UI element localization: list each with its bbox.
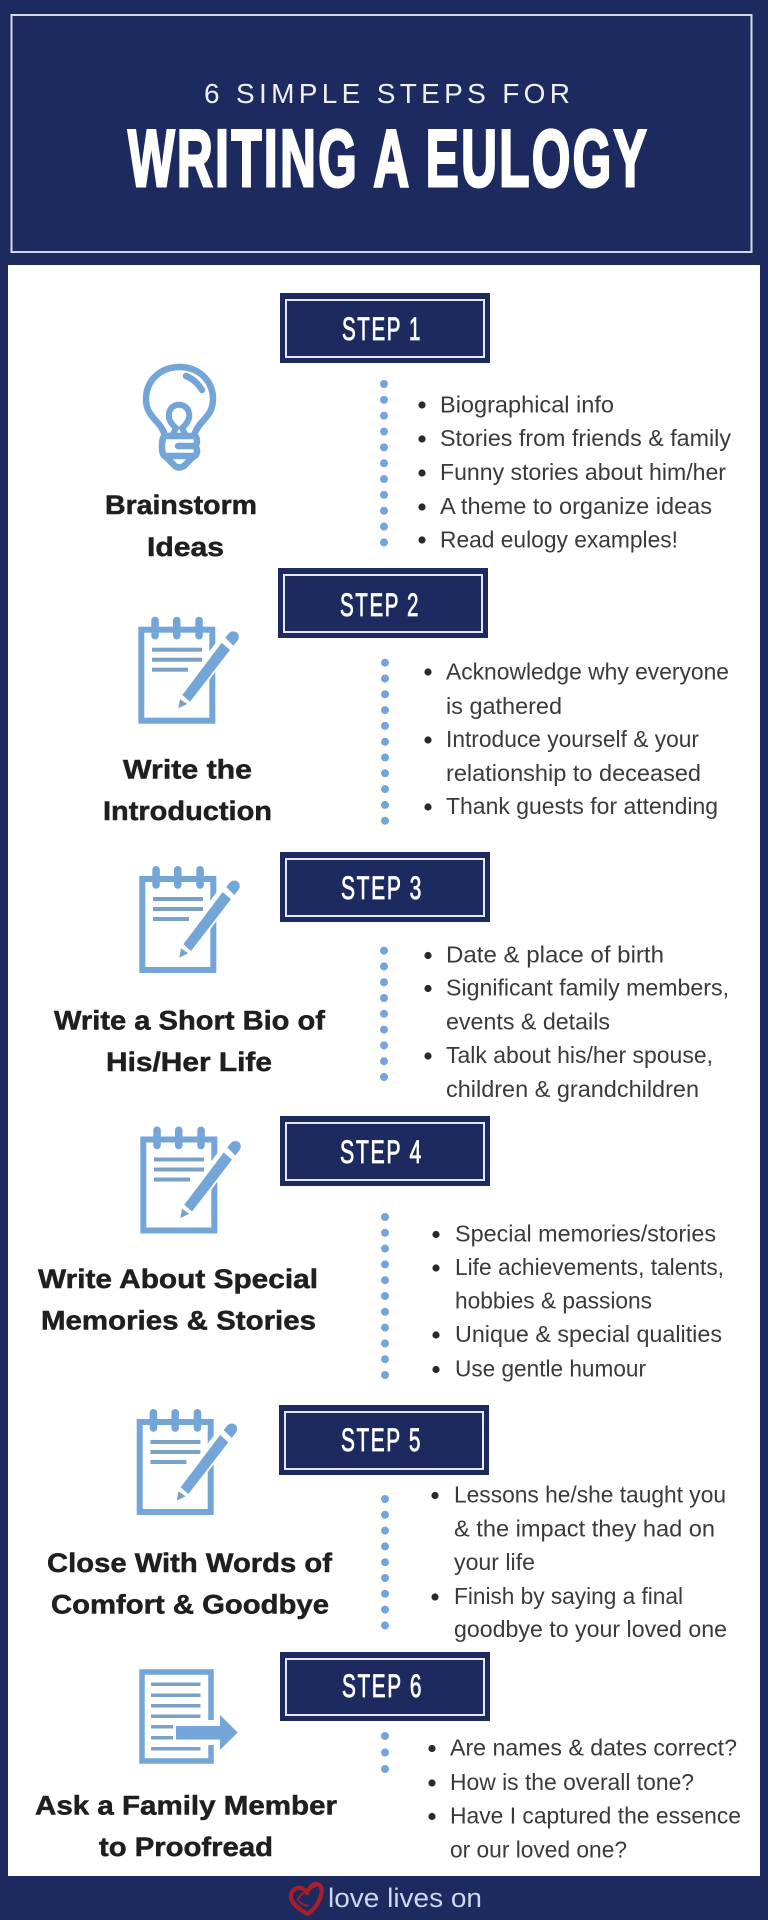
step 6 badge: STEP 6: [342, 1668, 423, 1704]
dotted divider: [381, 663, 389, 821]
heading: write a short bio: Write a Short Bio of: [54, 1006, 326, 1036]
bullet list: How is the overall tone?: [450, 1769, 694, 1795]
step 3 badge: [280, 852, 490, 922]
heading: brainstorm ideas: Brainstorm: [105, 490, 257, 520]
bullet list: Use gentle humour: [455, 1356, 646, 1382]
heading: write about special memories: Write About Special: [38, 1264, 318, 1294]
bullet list: A theme to organize ideas: [440, 493, 712, 519]
bullet list: [432, 1220, 724, 1382]
bullet list: [424, 658, 729, 819]
bullet list: [431, 1482, 727, 1642]
bullet list: goodbye to your loved one: [454, 1616, 727, 1642]
bullet list: Finish by saying a final: [454, 1583, 683, 1609]
bullet list: Talk about his/her spouse,: [446, 1042, 713, 1068]
panel: step 6: [35, 1652, 741, 1862]
heading: write the introduction: [103, 754, 272, 826]
icon: light bulb: [146, 367, 213, 468]
panel: step 5: [47, 1405, 727, 1642]
icon: notepad and pencil: [140, 1409, 237, 1512]
icon: notepad and pencil: [141, 617, 239, 721]
step 1 badge: [280, 293, 490, 363]
header panel: [12, 15, 752, 252]
bullet list: Date & place of birth: [446, 942, 664, 968]
dotted divider: [381, 1217, 389, 1375]
heading: close with words of comfort: Comfort & Goodbye: [51, 1590, 329, 1620]
bullet list: hobbies & passions: [455, 1288, 652, 1314]
bullet list: & the impact they had on: [454, 1516, 715, 1542]
bullet list: [418, 392, 731, 552]
panel: step 2: [103, 568, 729, 826]
heading: write the introduction: Introduction: [103, 796, 272, 826]
step 5 badge: [279, 1405, 489, 1475]
bullet list: Life achievements, talents,: [455, 1254, 724, 1280]
heading: ask a family member: to Proofread: [99, 1832, 273, 1862]
step 2 badge: STEP 2: [340, 587, 420, 623]
step 4 badge: [280, 1116, 490, 1186]
bullet list: Unique & special qualities: [455, 1321, 722, 1347]
heading: ask a family member: [35, 1790, 338, 1862]
step 5 badge: STEP 5: [341, 1422, 422, 1458]
bullet list: Thank guests for attending: [446, 793, 718, 819]
bullet list: children & grandchildren: [446, 1076, 699, 1102]
bullet list: your life: [454, 1549, 535, 1575]
heading: brainstorm ideas: [105, 490, 257, 562]
heading: write about special memories: Memories & Stories: [41, 1306, 316, 1336]
heading: write about special memories: [38, 1264, 318, 1336]
bullet list: Significant family members,: [446, 974, 729, 1000]
heading: close with words of comfort: Close With Words of: [47, 1548, 333, 1578]
dotted divider: [380, 384, 388, 543]
dotted divider: [381, 1736, 389, 1770]
dotted divider: [380, 951, 388, 1078]
bullet list: or our loved one?: [450, 1836, 627, 1862]
bullet list: relationship to deceased: [446, 760, 701, 786]
dotted divider: [381, 1499, 389, 1626]
bullet list: Read eulogy examples!: [440, 526, 678, 552]
icon: notepad and pencil: [142, 866, 240, 970]
heading: write a short bio: His/Her Life: [106, 1047, 272, 1077]
bullet list: Introduce yourself & your: [446, 726, 699, 752]
step 4 badge: STEP 4: [340, 1134, 423, 1170]
heading: ask a family member: Ask a Family Member: [35, 1790, 338, 1820]
icon: document with arrow: [142, 1672, 238, 1761]
bullet list: Acknowledge why everyone: [446, 658, 729, 684]
footer logo: [291, 1883, 482, 1914]
subtitle: 6 SIMPLE STEPS FOR: [204, 78, 570, 109]
heading: close with words of comfort: [47, 1548, 333, 1620]
icon: notepad and pencil: [143, 1126, 241, 1230]
bullet list: Have I captured the essence: [450, 1802, 741, 1828]
step 1 badge: STEP 1: [342, 311, 422, 347]
step 6 badge: [280, 1652, 490, 1721]
bullet list: Biographical info: [440, 392, 614, 418]
bullet list: Stories from friends & family: [440, 425, 731, 451]
bullet list: Funny stories about him/her: [440, 459, 726, 485]
bullet list: is gathered: [446, 693, 562, 719]
bullet list: Special memories/stories: [455, 1220, 716, 1246]
bullet list: Lessons he/she taught you: [454, 1482, 726, 1508]
icon: red heart: [291, 1884, 322, 1914]
panel: step 1: [105, 293, 731, 562]
panel: step 3: [54, 852, 729, 1102]
heading: write the introduction: Write the: [123, 754, 252, 784]
bullet list: [424, 942, 729, 1102]
bullet list: events & details: [446, 1008, 610, 1034]
bullet list: Are names & dates correct?: [450, 1734, 737, 1760]
brand name: love lives on: [328, 1883, 482, 1913]
bullet list: [428, 1734, 741, 1862]
step 2 badge: [278, 568, 488, 638]
step 3 badge: STEP 3: [341, 870, 423, 906]
heading: brainstorm ideas: Ideas: [147, 532, 224, 562]
panel: step 4: [38, 1116, 724, 1382]
heading: write a short bio: [54, 1006, 326, 1077]
